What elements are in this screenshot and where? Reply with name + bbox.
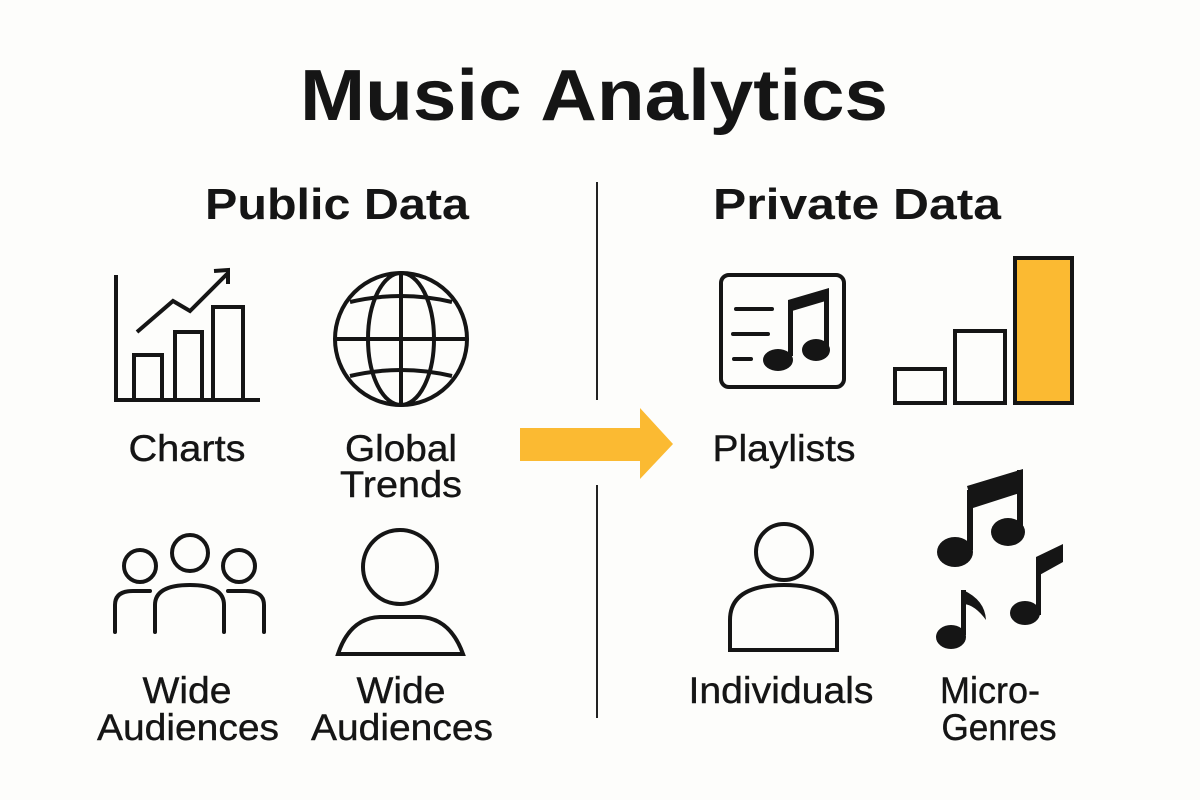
label: global trends: Global [345, 428, 457, 469]
label: charts: Charts [128, 428, 246, 469]
label: individuals: Individuals [688, 670, 874, 711]
heading: private data: Private Data [713, 180, 1002, 229]
icon: bar chart [895, 258, 1072, 403]
label: wide audiences 2: Audiences [311, 707, 493, 748]
icon: playlist [721, 275, 844, 387]
icon: group [115, 535, 264, 632]
label: wide audiences 2: Wide [356, 670, 446, 711]
label: micro-genres: Genres [942, 707, 1056, 748]
label: playlists: Playlists [712, 428, 856, 469]
heading: public data: Public Data [205, 180, 470, 229]
label: global trends: Trends [340, 464, 462, 505]
arrow [520, 408, 673, 479]
title: Music Analytics [300, 56, 888, 136]
icon: person [338, 530, 463, 654]
icon: notes [936, 469, 1063, 649]
label: wide audiences 1: Wide [142, 670, 232, 711]
label: wide audiences 1: Audiences [97, 707, 279, 748]
label: micro-genres: Micro- [940, 670, 1040, 711]
icon: individual [730, 524, 837, 650]
icon: charts [116, 270, 260, 400]
icon: globe [335, 273, 467, 405]
